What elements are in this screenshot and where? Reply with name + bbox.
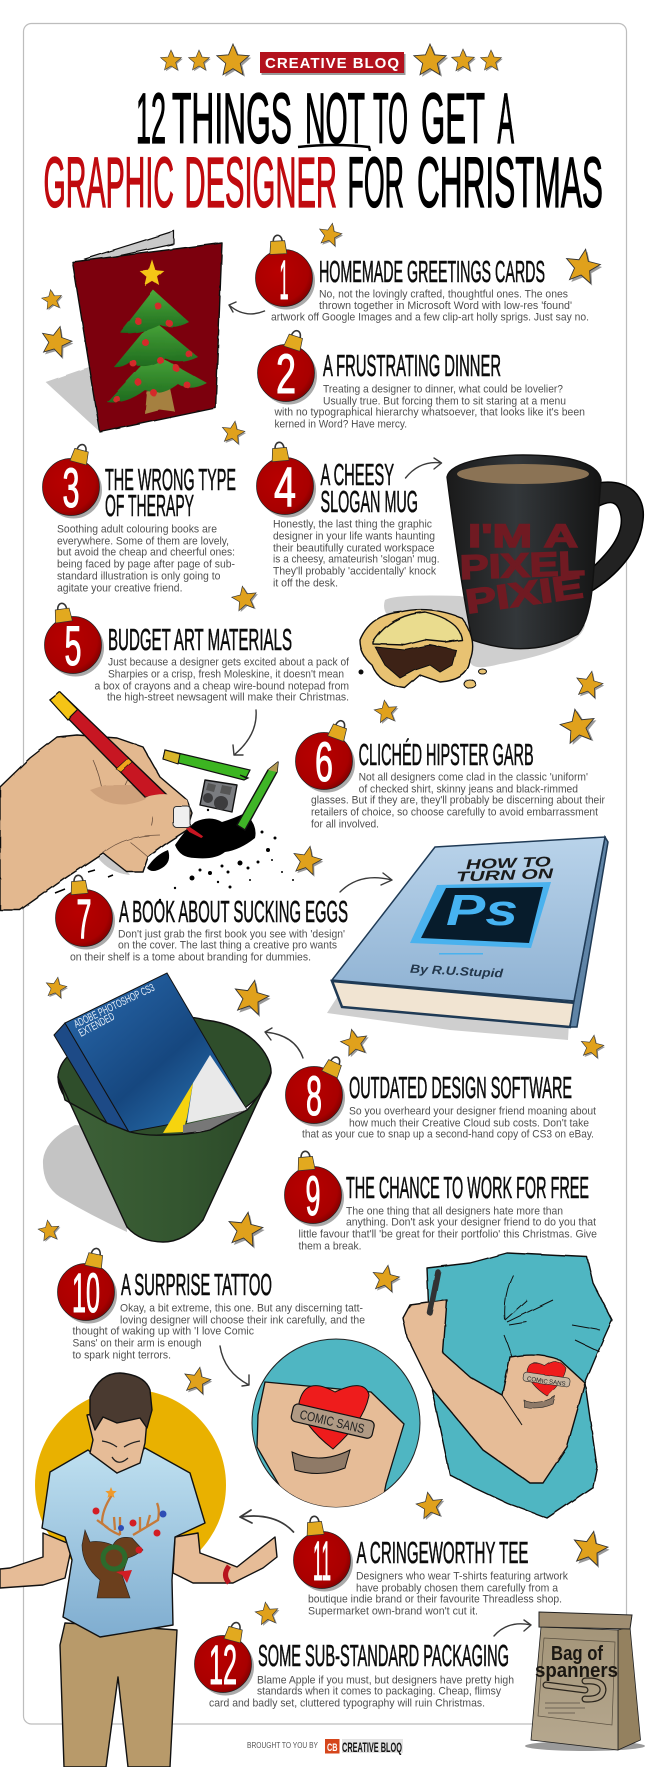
- icon: bauble 6: [296, 718, 355, 793]
- title: A: [498, 80, 514, 159]
- text block 9: them a break.: [298, 1240, 362, 1252]
- text block 2: [274, 384, 585, 430]
- icon: bauble 7: [56, 875, 115, 950]
- text block 2: with no typographical hierarchy whatsoever, that looks like it's been: [274, 406, 585, 418]
- text block 7: Don't just grab the first book you see with 'design': [118, 928, 345, 940]
- software box: EXTENDED: [77, 1011, 117, 1040]
- icon: bauble 1: 1: [280, 248, 288, 311]
- illustration: arm with tattoo: [403, 1253, 612, 1518]
- title: FOR: [348, 144, 404, 223]
- text block 10: to spark night terrors.: [72, 1350, 171, 1362]
- arrow: item 7 to book: [340, 873, 392, 892]
- icon: bauble 6: 6: [315, 730, 333, 793]
- arrow: item 11 to tee: [240, 1510, 294, 1532]
- item 10: [58, 1247, 365, 1362]
- icon: bauble 12: [194, 1620, 254, 1696]
- book title: TURN ON: [456, 865, 555, 885]
- icon: bauble 8: 8: [306, 1064, 322, 1127]
- header badge with stars: [161, 44, 503, 77]
- text block 3: but avoid the cheap and cheerful ones:: [57, 546, 235, 558]
- mug slogan: PIXIE: [463, 567, 585, 621]
- illustration: Photoshop book: By R.U.Stupid: [410, 962, 504, 981]
- title: DESIGNER: [184, 144, 337, 223]
- illustration: hand with marker pen: [0, 692, 202, 910]
- icon: bauble 8: [286, 1054, 345, 1127]
- heading 3: OF THERAPY: [105, 488, 194, 523]
- text block 4: Honestly, the last thing the graphic: [273, 518, 433, 530]
- text block 9: [298, 1206, 597, 1252]
- icon: bauble 2: 2: [276, 342, 296, 405]
- icon: bauble 4: [256, 442, 316, 518]
- text block 7: on the cover. The last thing a creative pro wants: [118, 940, 337, 952]
- text: THE WRONG TYPE: [105, 462, 236, 497]
- icon: decorative stars middle: [230, 584, 607, 878]
- text block 2: Usually true. But forcing them to sit staring at a menu: [323, 396, 566, 408]
- item 7: [56, 875, 348, 964]
- text block 12: standards when it comes to packaging. Cheap, flimsy: [257, 1686, 502, 1698]
- text block 3: [57, 524, 235, 594]
- illustration: green pencil: [237, 762, 278, 830]
- heading 3: [105, 462, 236, 523]
- icon: decorative stars bottom: [181, 1365, 613, 1627]
- footer credit: BROUGHT TO YOU BY: [247, 1741, 319, 1750]
- illustration: man in reindeer tee: [0, 1373, 277, 1767]
- mug slogan: I'M A: [468, 518, 578, 554]
- text block 3: standard illustration is only going to: [57, 570, 221, 582]
- text block 6: Not all designers come clad in the classic 'uniform': [359, 772, 588, 784]
- text block 8: [302, 1106, 596, 1140]
- mug slogan: PIXEL: [459, 545, 585, 587]
- title: THINGS: [172, 80, 292, 159]
- footer credit: [247, 1739, 403, 1755]
- illustration: bin with CS3 box: [54, 973, 271, 1242]
- text block 4: They'll probably 'accidentally' knock: [273, 566, 437, 578]
- text block 5: [94, 656, 349, 704]
- item 9: [284, 1151, 597, 1252]
- hair: [90, 1373, 152, 1430]
- illustration: Photoshop book: [327, 837, 608, 1040]
- text block 10: thought of waking up with 'I love Comic: [72, 1326, 255, 1338]
- text block 12: Blame Apple if you must, but designers have pretty high: [257, 1674, 514, 1686]
- text block 8: that as your cue to snap up a second-hand copy of CS3 on eBay.: [302, 1128, 594, 1140]
- icon: bauble 11: 11: [313, 1529, 331, 1592]
- text block 6: retailers of choice, so choose carefully to avoid embarrassment: [311, 806, 598, 818]
- icon: decorative stars top: [37, 221, 605, 446]
- badge: Creative Bloq: CREATIVE BLOQ: [265, 55, 399, 72]
- mug slogan: [459, 518, 585, 621]
- bag label: Bag of: [551, 1643, 603, 1665]
- logo: CB: [327, 1742, 338, 1754]
- text block 1: [271, 288, 589, 324]
- illustration: sharpener: [200, 780, 237, 812]
- small tattoo: COMIC SANS: [526, 1376, 566, 1388]
- text block 11: Supermarket own-brand won't cut it.: [308, 1606, 478, 1618]
- text block 12: card and badly set, cluttered typography will ruin Christmas.: [209, 1698, 485, 1710]
- title: GET: [421, 80, 485, 159]
- text block 9: anything. Don't ask your designer friend to do you that: [346, 1216, 596, 1228]
- text block 3: Soothing adult colouring books are: [57, 524, 217, 536]
- arrow: item 1 to card: [229, 302, 264, 314]
- text block 11: have probably chosen them carefully from a: [356, 1582, 558, 1594]
- illustration: shadow under mug and pie: [384, 596, 585, 667]
- text block 11: boutique indie brand or their favourite Threadless shop.: [308, 1594, 562, 1606]
- illustration: bag of spanners: [525, 1612, 645, 1751]
- text block 9: little favour that'll 'be great for their portfolio' this Christmas. Give: [298, 1228, 597, 1240]
- yellow circle: [35, 1390, 226, 1580]
- icon: bauble 7: 7: [76, 887, 92, 950]
- text block 3: everywhere. Some of them are lovely,: [57, 536, 229, 548]
- text block 4: [273, 518, 440, 590]
- text block 6: [311, 772, 605, 830]
- item 5: BUDGET ART MATERIALS: [108, 622, 292, 657]
- text block 11: [308, 1570, 569, 1618]
- text block 5: Sharpies or a crisp, fresh Moleskine, it doesn't mean: [108, 668, 344, 680]
- item 4: [256, 442, 440, 590]
- text block 9: The one thing that all designers hate more than: [346, 1206, 563, 1218]
- icon: bauble 4: 4: [274, 455, 296, 518]
- bag label: spanners: [535, 1660, 618, 1682]
- text block 10: loving designer will choose their ink carefully, and the: [120, 1314, 365, 1326]
- text block 2: kerned in Word? Have mercy.: [274, 418, 407, 430]
- software box: ADOBE PHOTOSHOP CS3: [72, 982, 157, 1031]
- item 6: [296, 718, 605, 830]
- item 1: [256, 235, 589, 324]
- item 4: SLOGAN MUG: [320, 484, 418, 519]
- illustration: mince pie: [358, 610, 487, 688]
- bag label: [535, 1643, 618, 1682]
- software box: [54, 973, 247, 1133]
- illustration: shadow under hand: [98, 850, 130, 875]
- arrow: item 10 to magnifier: [220, 1346, 249, 1386]
- text block 2: Treating a designer to dinner, what could be lovelier?: [323, 384, 563, 396]
- icon: bauble 11: [294, 1516, 353, 1592]
- heading 4: [320, 457, 418, 519]
- arrow: item 4 to mug: [406, 458, 442, 478]
- item 8: [286, 1054, 596, 1140]
- face: [87, 1410, 147, 1473]
- wristband: [226, 1566, 229, 1583]
- text block 12: [209, 1674, 514, 1710]
- item 5: [44, 602, 349, 704]
- book title: [456, 853, 555, 885]
- text block 5: the high-street newsagent will make their Christmas.: [107, 692, 349, 704]
- text block 5: Just because a designer gets excited about a pack of: [108, 656, 349, 668]
- title: [44, 80, 603, 223]
- icon: bauble 12: 12: [209, 1633, 237, 1696]
- item 12: [194, 1620, 514, 1710]
- tattoo banner: COMIC SANS: [298, 1407, 366, 1436]
- illustration: green crayon: [163, 750, 250, 780]
- arrow: item 12 to bag: [494, 1620, 531, 1636]
- arrow: item 8 to bin: [265, 1028, 303, 1058]
- badge: Creative Bloq: [260, 52, 406, 75]
- icon: bauble 3: 3: [62, 456, 80, 519]
- book title: HOW TO: [465, 853, 551, 872]
- text block 1: No, not the lovingly crafted, thoughtful ones. The ones: [319, 288, 568, 300]
- illustration: greetings card: [46, 231, 222, 432]
- icon: decorative stars lower: [37, 975, 607, 1294]
- illustration: shadow under bin: [43, 1125, 127, 1232]
- icon: bauble 9: [284, 1151, 344, 1227]
- illustration: Photoshop book: Ps: [446, 886, 518, 935]
- title: TO: [373, 80, 408, 159]
- icon: bauble 10: 10: [72, 1261, 100, 1324]
- text block 4: designer in your life wants haunting: [273, 530, 435, 542]
- reindeer print: [82, 1487, 166, 1598]
- text block 7: on their shelf is a tome about branding for dummies.: [70, 952, 311, 964]
- logo: CREATIVE BLOQ: [342, 1739, 402, 1755]
- icon: bauble 5: [44, 602, 104, 677]
- text block 6: glasses. But if they are, they'll probably be discerning about their: [311, 794, 605, 806]
- item 3: [42, 442, 236, 594]
- arrow: item 5 to materials: [233, 710, 256, 755]
- illustration: tattoo magnifier: [252, 1339, 420, 1515]
- text block 8: So you overheard your designer friend moaning about: [349, 1106, 596, 1118]
- icon: bauble 1: [256, 235, 315, 311]
- heading 4: A CHEESY: [320, 457, 394, 492]
- logo: [325, 1739, 403, 1755]
- text block 4: is a cheesy, amateurish 'slogan' mug.: [273, 554, 440, 566]
- text block 3: being faced by page after page of sub-: [57, 558, 235, 570]
- text block 1: thrown together in Microsoft Word with low-res 'found': [319, 300, 572, 312]
- text block 6: of checked shirt, skinny jeans and black-rimmed: [359, 784, 578, 796]
- title: GRAPHIC: [44, 144, 174, 223]
- text block 3: agitate your creative friend.: [57, 582, 182, 594]
- text block 5: a box of crayons and a cheap wire-bound notepad from: [94, 680, 349, 692]
- text block 7: [70, 928, 345, 964]
- icon: wrench: [546, 1681, 603, 1699]
- title: NOT: [305, 80, 365, 159]
- text block 11: Designers who wear T-shirts featuring artwork: [356, 1570, 569, 1582]
- icon: bauble 5: 5: [64, 614, 82, 677]
- illustration: ink splat: [55, 809, 294, 901]
- small tattoo: [523, 1361, 570, 1408]
- text block 10: [72, 1302, 365, 1362]
- trousers: [60, 1623, 177, 1767]
- icon: star row left: [161, 44, 251, 77]
- icon: bauble 9: 9: [306, 1164, 320, 1227]
- item 10: A SURPRISE TATTOO: [121, 1267, 272, 1302]
- arms: [0, 1533, 72, 1588]
- text block 4: their beautifully curated workspace: [273, 542, 435, 554]
- title: 12: [136, 80, 166, 159]
- item 11: [294, 1516, 569, 1618]
- t-shirt: [42, 1448, 205, 1637]
- icon: bauble 3: [42, 442, 102, 519]
- icon: bauble 2: [258, 328, 317, 405]
- icon: bauble 10: [58, 1247, 117, 1324]
- item 2: [258, 328, 585, 430]
- text: A BOOK ABOUT SUCKING EGGS: [119, 894, 348, 929]
- text block 1: artwork off Google Images and a few clip-art holly sprigs. Just say no.: [271, 312, 589, 324]
- illustration: pixel pixie mug: [447, 455, 643, 649]
- text block 8: how much their Creative Cloud sub costs. Don't take: [349, 1118, 589, 1130]
- text block 10: Okay, a bit extreme, this one. But any discerning tatt-: [120, 1302, 363, 1314]
- text block 4: it off the desk.: [273, 578, 338, 590]
- text block 6: for all involved.: [311, 818, 379, 830]
- icon: star row right: [414, 44, 503, 77]
- text block 10: Sans' on their arm is enough: [72, 1338, 202, 1350]
